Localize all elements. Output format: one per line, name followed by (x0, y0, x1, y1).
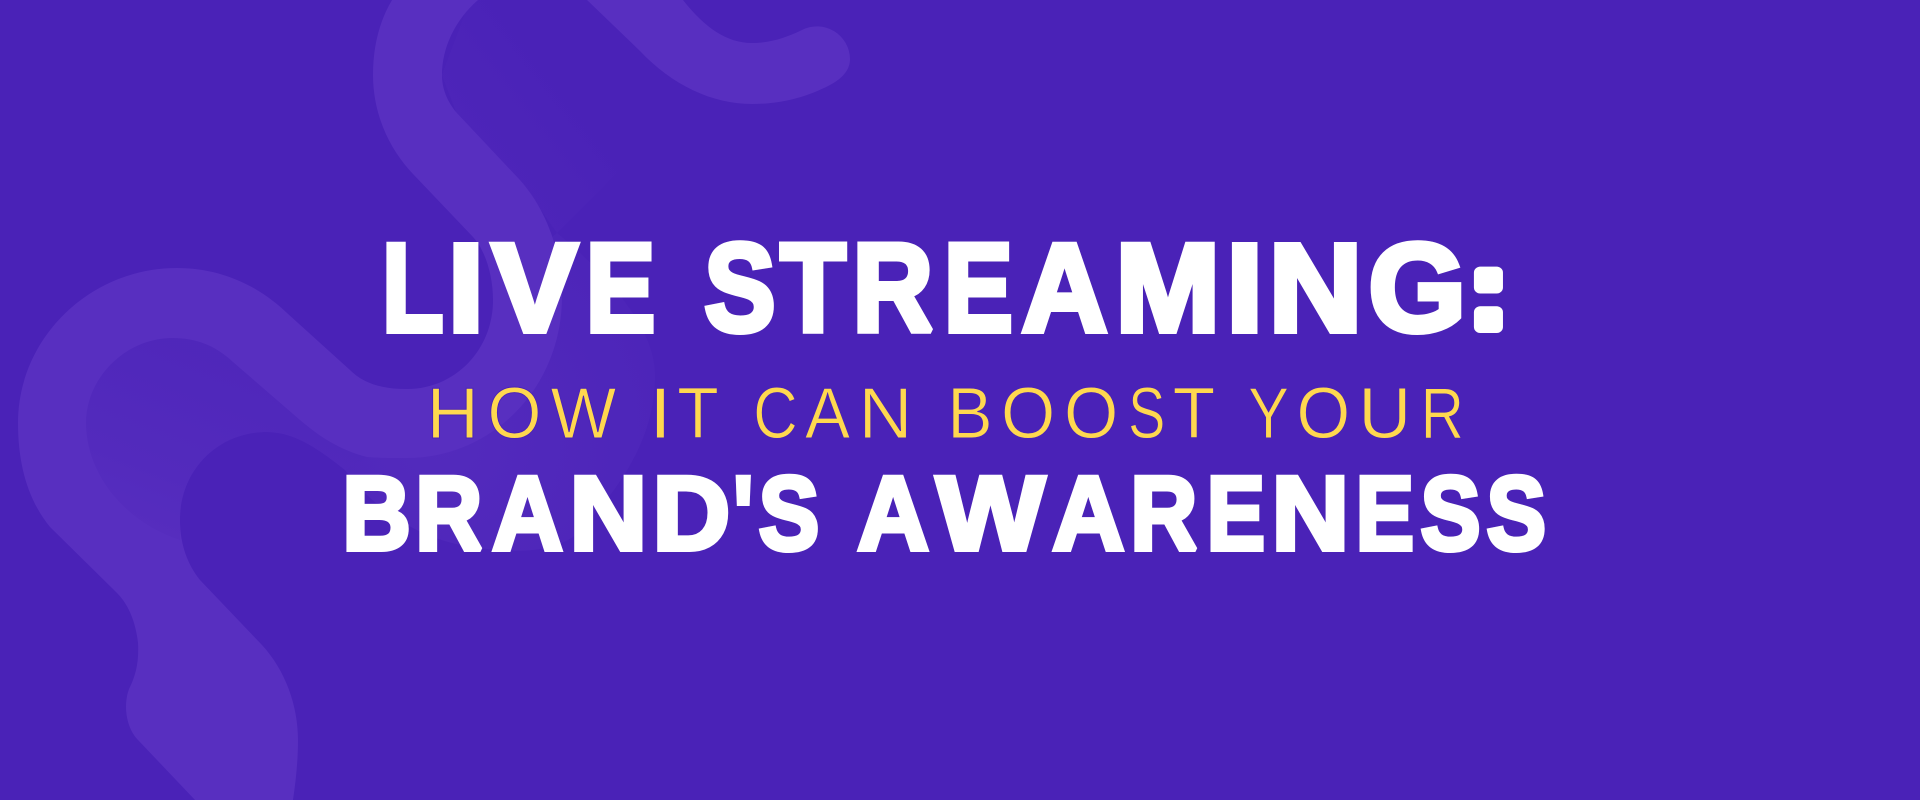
word: HOW: H (427, 374, 479, 454)
title: Live Streaming (382, 219, 1508, 358)
word: BRAND'S: R (415, 456, 482, 572)
word: STREAMING: A (1022, 219, 1107, 358)
word: YOUR: R (1421, 374, 1464, 454)
word: STREAMING: E (944, 219, 1013, 358)
word: AWARENESS: S (1487, 456, 1546, 572)
word: LIVE: L (382, 219, 443, 358)
word: IT: I (648, 374, 672, 454)
word: STREAMING: G (1368, 219, 1466, 358)
word: STREAMING: : (1469, 229, 1508, 350)
word: IT: T (677, 374, 719, 454)
word: BOOST: T (1173, 374, 1215, 454)
word: CAN: A (805, 374, 850, 454)
word: BRAND'S: S (759, 456, 819, 572)
word: AWARENESS: A (1052, 456, 1124, 572)
title: Brand's Awareness (342, 456, 1546, 572)
word: BRAND'S: N (570, 456, 647, 572)
word: STREAMING: S (704, 219, 776, 358)
word: YOUR: U (1358, 374, 1411, 454)
word: LIVE: I (448, 219, 484, 358)
word: BRAND'S: ' (733, 456, 753, 572)
word: CAN: N (858, 374, 912, 454)
word: AWARENESS: E (1207, 456, 1265, 572)
word: BOOST: B (947, 374, 993, 454)
word: AWARENESS: N (1272, 456, 1349, 572)
word: AWARENESS: E (1356, 456, 1414, 572)
word: HOW: O (488, 374, 541, 454)
word: HOW: W (551, 374, 616, 454)
word: BOOST: O (1064, 374, 1118, 454)
word: YOUR: Y (1248, 374, 1289, 454)
word: BRAND'S: D (653, 456, 730, 572)
word: BRAND'S: B (342, 456, 411, 572)
word: LIVE: E (586, 219, 655, 358)
word: BRAND'S: A (492, 456, 563, 572)
word: AWARENESS: W (936, 456, 1045, 572)
word: AWARENESS: R (1130, 456, 1197, 572)
word: STREAMING: I (1226, 219, 1263, 358)
decorative squiggle (18, 0, 850, 800)
word: CAN: C (753, 374, 798, 454)
word: AWARENESS: A (857, 456, 929, 572)
word: BOOST: O (1001, 374, 1055, 454)
word: AWARENESS: S (1421, 456, 1480, 572)
word: STREAMING: R (853, 219, 933, 358)
word: LIVE: V (492, 219, 577, 358)
word: YOUR: O (1296, 374, 1350, 454)
subtitle: How it can boost your (427, 374, 1464, 454)
word: BOOST: S (1128, 374, 1165, 454)
word: STREAMING: T (780, 219, 846, 358)
word: STREAMING: N (1269, 219, 1362, 358)
word: STREAMING: M (1116, 219, 1220, 358)
